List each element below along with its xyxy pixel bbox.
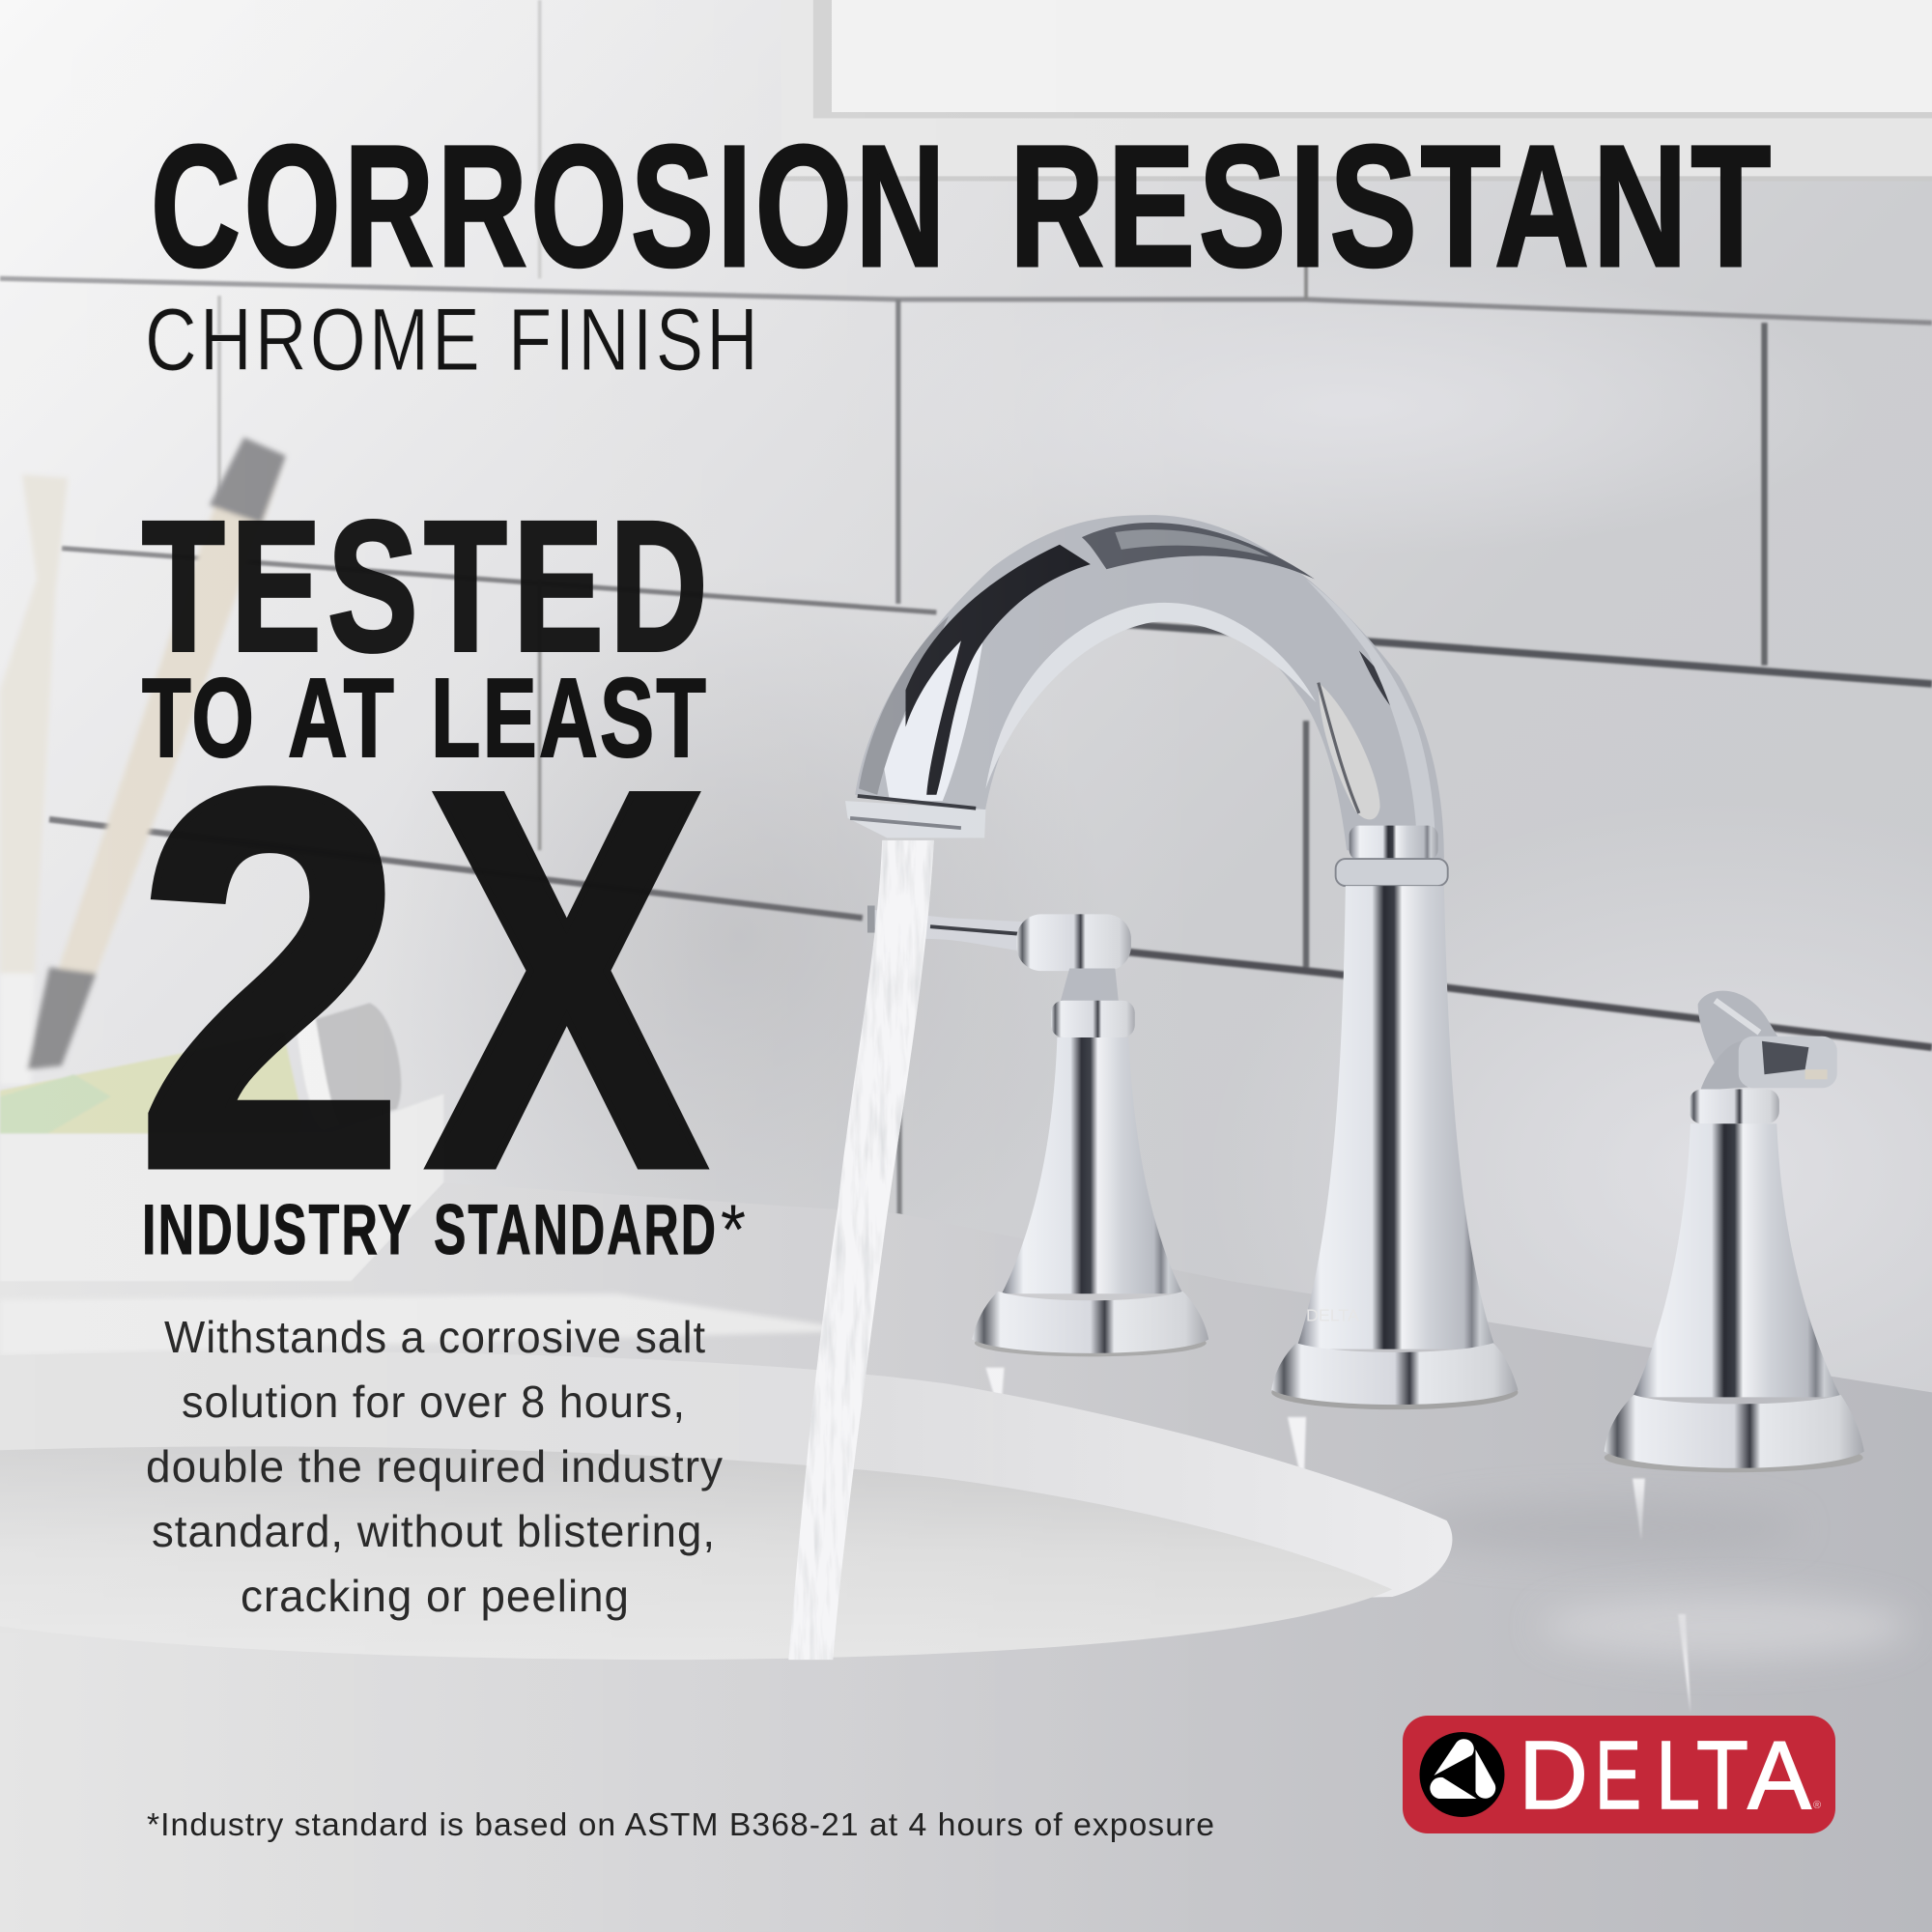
headline: 2X: X (426, 679, 709, 1279)
headline: 2X (135, 679, 709, 1279)
body copy: cracking or peeling (241, 1571, 630, 1621)
logo mark (1420, 1732, 1505, 1817)
body copy: solution for over 8 hours, (182, 1377, 686, 1427)
headline: to at least: LEAST (431, 655, 708, 781)
body copy: double the required industry (146, 1441, 724, 1492)
headline: industry standard: * (721, 1191, 746, 1269)
engraved faucet mark: DELTA (1306, 1305, 1359, 1324)
headline: industry standard: INDUSTRY (142, 1191, 413, 1269)
spout (855, 515, 1444, 860)
body base (1271, 1343, 1518, 1409)
headline: 2X: 2 (135, 679, 406, 1279)
subtitle: FINISH (508, 291, 761, 389)
sink rim (0, 1351, 1452, 1633)
headline: to at least (142, 655, 708, 781)
Delta logo (1403, 1716, 1835, 1833)
headline: to at least: AT (288, 655, 396, 781)
title (151, 109, 1775, 302)
subtitle: CHROME (145, 291, 483, 389)
title: CORROSION (151, 109, 949, 302)
body copy: Withstands a corrosive salt (164, 1312, 706, 1362)
vanity counter (0, 1182, 1932, 1932)
body copy (146, 1312, 724, 1621)
spout outlet lip (845, 796, 985, 838)
logo wordmark: L (1656, 1721, 1700, 1830)
logo wordmark: A (1747, 1721, 1811, 1830)
toothbrushes (0, 438, 286, 1084)
footnote: *Industry standard is based on ASTM B368-21 at 4 hours of exposure (147, 1806, 1215, 1842)
left handle (867, 905, 1208, 1356)
registered mark: ® (1813, 1800, 1821, 1811)
logo wordmark: D (1519, 1721, 1588, 1830)
chrome faucet (845, 515, 1864, 1472)
headline: industry standard (142, 1191, 746, 1269)
faucet body (1271, 859, 1518, 1409)
logo wordmark: T (1696, 1721, 1748, 1830)
logo wordmark (1519, 1721, 1811, 1830)
sink bowl (0, 1446, 1392, 1660)
counter reflections and veins (0, 1293, 1910, 1713)
white haze over left side (0, 0, 1233, 1932)
body copy: standard, without blistering, (152, 1506, 716, 1556)
mirror frame (781, 0, 1932, 181)
headline: tested: TESTED (142, 482, 714, 690)
running water (788, 840, 934, 1660)
headline: to at least: TO (142, 655, 256, 781)
toothpaste tray (0, 1003, 443, 1282)
headline: industry standard: STANDARD (434, 1191, 718, 1269)
right handle (1605, 991, 1864, 1472)
subtitle (145, 291, 761, 389)
logo wordmark: E (1595, 1721, 1641, 1830)
